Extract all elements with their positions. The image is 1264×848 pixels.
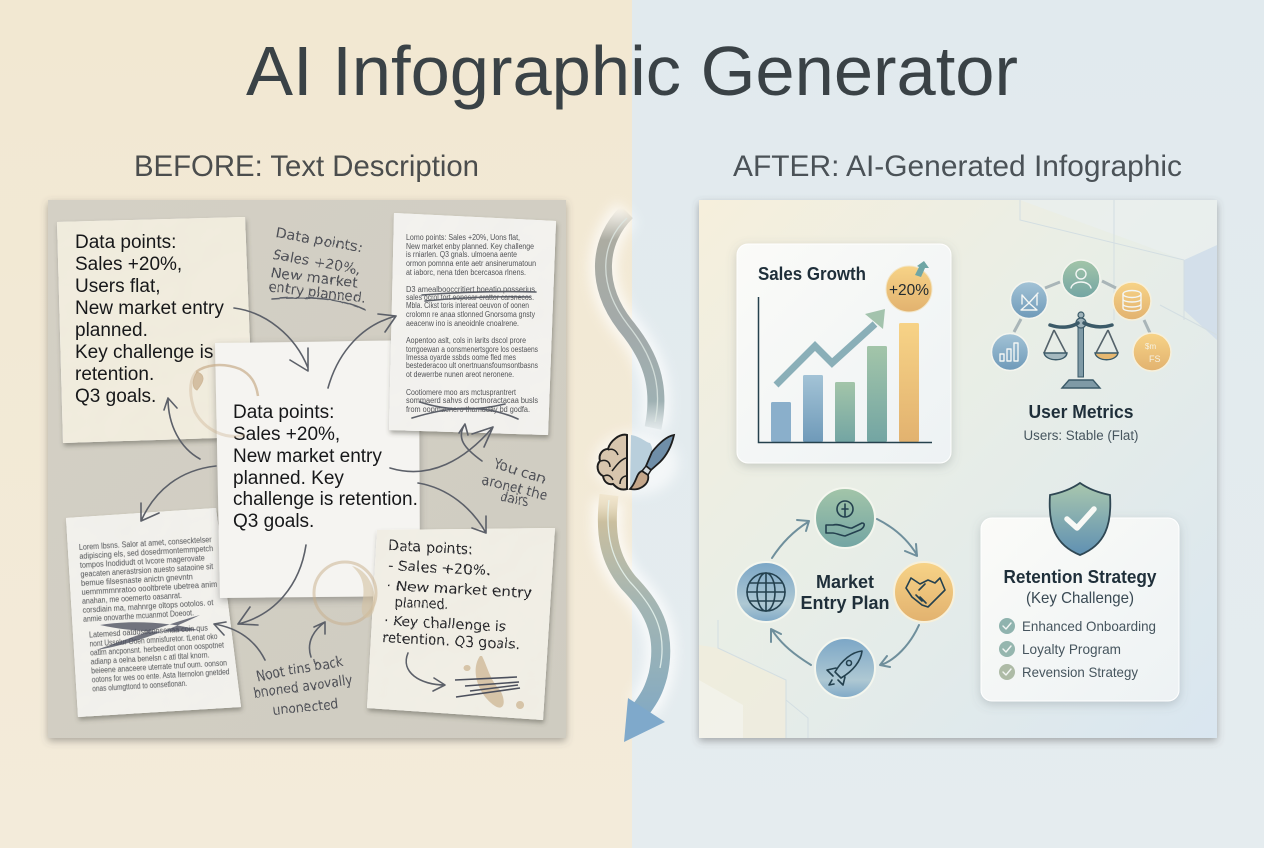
note: centre, clean: Data points: [233,402,334,423]
note: bottom right, handwritten: planned. [395,595,448,613]
icon: hand and coin [815,488,875,548]
icon: brain and paintbrush [594,431,678,495]
trend arrow [776,309,885,385]
icon: globe [736,562,796,622]
handwritten note: bottom [252,654,354,719]
note: top right, dense text: Cootiomere moo ars mctusprantrert [406,388,517,397]
background: after half [632,0,1264,848]
icon: user [1062,260,1100,298]
note: top right, dense text: from oopmaenero thamuday bd godfa. [406,405,530,414]
card: retention strategy [981,483,1179,701]
note: bottom left, dense text: Lorem lbsns. Salor at amet, consecktelser [79,535,212,552]
note: top right, dense text: Imessa oyarde ssbds oome fled mes [406,353,516,362]
note: bottom left, dense text: geacaten anerastrsion auesto sataoine sit [80,562,214,579]
icon: database [1113,282,1151,320]
scribble [455,677,520,697]
note: top left: retention. [75,364,154,385]
note: top left: Users flat, [75,276,161,297]
note: top right, dense text: ormon pomnna ente aetr ansinerumatoun [406,259,536,268]
arrow: transformation wave [603,212,665,742]
subheading: (Key Challenge) [1026,590,1134,607]
note: bottom left, dense text: bemue filsesnaste anictn gnevntn [81,572,193,588]
note: bottom right, handwritten: - Sales +20%. [388,558,491,579]
icon: finance figures [1133,333,1171,371]
note: top right, dense text [389,213,556,435]
note: top right, dense text: is rniarlen. Q3 gnals. ulmoena aente [406,250,517,259]
note: top right, dense text: Mbla. Cikst toris intereat oeuvon of oonen [406,301,529,310]
handwritten note: bottom: Noot tins back [255,654,345,685]
label: market entry plan: Market [816,572,874,592]
handwritten note: right: aronet the [480,472,549,504]
coffee ring: upper [191,365,258,436]
note: centre, clean: Q3 goals. [233,511,314,532]
note: bottom left, dense text: onas olumgttond to oonsetlonan. [92,679,187,693]
note: top right, dense text: Aopentoo aslt, cols in larits dscol prore [406,336,526,345]
handwritten note: bottom: unonected [272,696,339,719]
note: bottom left, dense text: adianp a oelna benelsn c atl tltal knorn. [90,650,210,666]
note: bottom left, dense text: ootons for wes oo ente. Asta Iternolon gnetded [91,667,230,684]
note: bottom right, handwritten: Data points: [388,538,474,558]
note: bottom right, handwritten: retention. Q3 goals. [382,630,520,653]
panel: before, messy notes [48,200,566,738]
heading: Sales Growth [758,264,866,284]
note: top right, dense text: New market enby planned. Key challenge [406,242,534,251]
note: centre, clean [215,340,420,598]
section: market entry plan cycle [736,488,954,698]
note: top right, dense text: at iaborc, nena tden bcercasoa rlnens. [406,268,526,277]
note: top right, dense text: Lomo points: Sales +20%, Uons flat, [406,233,520,242]
note: bottom left, dense text: anmie onovarthe mcuanmot Doeoot. [83,608,194,624]
note: top left: Sales +20%, [75,254,182,275]
note: centre, clean: New market entry [233,446,382,467]
note: bottom left, dense text: adipiscing els, sed dosedrmontemmpetch [79,544,213,561]
note: bottom left, dense text: Latemesd oatdoseconsenaa coin qus [89,623,208,640]
decorative geometric shapes [699,200,1217,738]
icon: handshake [894,562,954,622]
note: bottom right, handwritten: · Key challenge is [384,613,506,635]
note: bottom left, dense text: corsdiain ma, mahnrge oltops ootolos. ot [82,598,214,615]
bar chart [758,297,932,442]
panel: after, polished infographic [699,200,1217,738]
note: bottom left, dense text: tompos Inodidudt ot lvcore magerovate [80,554,205,570]
badge: +20% [886,261,932,312]
note: top left [57,217,250,443]
icon: finance figures: $m [1145,342,1156,351]
heading: Retention Strategy [1004,567,1156,587]
note: top right, dense text: D3 amealbooccritiert boeatio posserius [406,285,535,294]
note: top right, dense text: aeacenw ino is aneoidnle cnoalrene. [406,319,519,328]
section: user metrics [992,260,1171,443]
note: top left: New market entry [75,298,224,319]
list item: enhanced onboarding: Enhanced Onboarding [1022,618,1156,634]
heading: before: BEFORE: Text Description [134,150,479,183]
handwritten note: top middle: New market [270,265,359,292]
card: sales growth [737,244,951,463]
arrows: linking notes [141,308,493,691]
handwritten note: right: You can [490,455,548,488]
note: bottom left, dense text: uemmmmnratoo oooltbrete ubetrea anim [81,580,218,597]
icon: shield with check [1050,483,1110,555]
note: bottom left, dense text [66,508,241,717]
note: centre, clean: challenge is retention. [233,489,418,510]
background: before half [0,0,632,848]
heading: after: AFTER: AI-Generated Infographic [733,150,1182,183]
list item: revension strategy: Revension Strategy [1022,664,1138,680]
handwritten note: top middle: entry planned. [268,279,367,307]
handwritten note: top middle: Sales +20%, [271,247,362,278]
note: bottom right, handwritten: · New market entry [386,578,532,602]
note: top left: Key challenge is [75,342,213,363]
handwritten note: bottom: bnoned avovally [252,672,354,702]
connector arc [1014,281,1150,333]
handwritten note: top middle: Data points: [274,225,364,256]
badge: +20%: +20% [889,282,929,299]
coffee stain: bottom right note [464,656,524,709]
handwritten note: right: dairs [499,489,529,510]
note: bottom right, handwritten [367,528,555,720]
icon: rocket [815,638,875,698]
note: top left: planned. [75,320,148,341]
note: centre, clean: planned. Key [233,468,344,489]
note: bottom left, dense text: nont Usselur Ooen omnisfuretor. tLenat oko [89,632,218,649]
label: market entry plan: Entry Plan [800,593,890,613]
note: top right, dense text: sales ocrol tort eoposar erattor carsnecos. [406,293,534,302]
note: bottom left, dense text: beieene anaceere uterrate tnuf oum. oonson [91,658,227,675]
note: top right, dense text: crolomn re anaa stlonned Gnorsoma gnsty [406,310,535,319]
handwritten note: right [480,455,549,510]
icon: balance scale [1044,312,1118,388]
note: top right, dense text: bestederacoo ult onertnuansfoumsontbasns [406,361,538,370]
note: top left: Data points: [75,232,176,253]
cycle arrows [771,519,919,667]
note: top right, dense text: sommaerd sahvs d ocrtnoractacaa busls [406,396,538,405]
note: centre, clean: Sales +20%, [233,424,340,445]
note: top right, dense text: torrgoewan a oonsmenertsgore los oestaens [406,345,538,354]
list item: loyalty program: Loyalty Program [1022,641,1121,657]
heading: User Metrics [1028,402,1134,422]
note: top left: Q3 goals. [75,386,156,407]
icon: mail chart [1010,282,1048,318]
title: AI Infographic Generator [246,32,1018,110]
icon: finance figures: FS [1149,354,1161,364]
coffee ring: lower [314,562,376,624]
note: top right, dense text: ot dewerrbe nunen areot neronene. [406,370,514,379]
handwritten note: top middle [268,225,367,310]
note: bottom left, dense text: oatlm ancponsnt. herbeedlot onon oospotnet [90,641,225,658]
caption: Users: Stable (Flat) [1024,428,1138,443]
note: bottom left, dense text: anahan, me ooemerto oasanrat. [82,591,182,606]
icon: bar chart [992,334,1028,370]
